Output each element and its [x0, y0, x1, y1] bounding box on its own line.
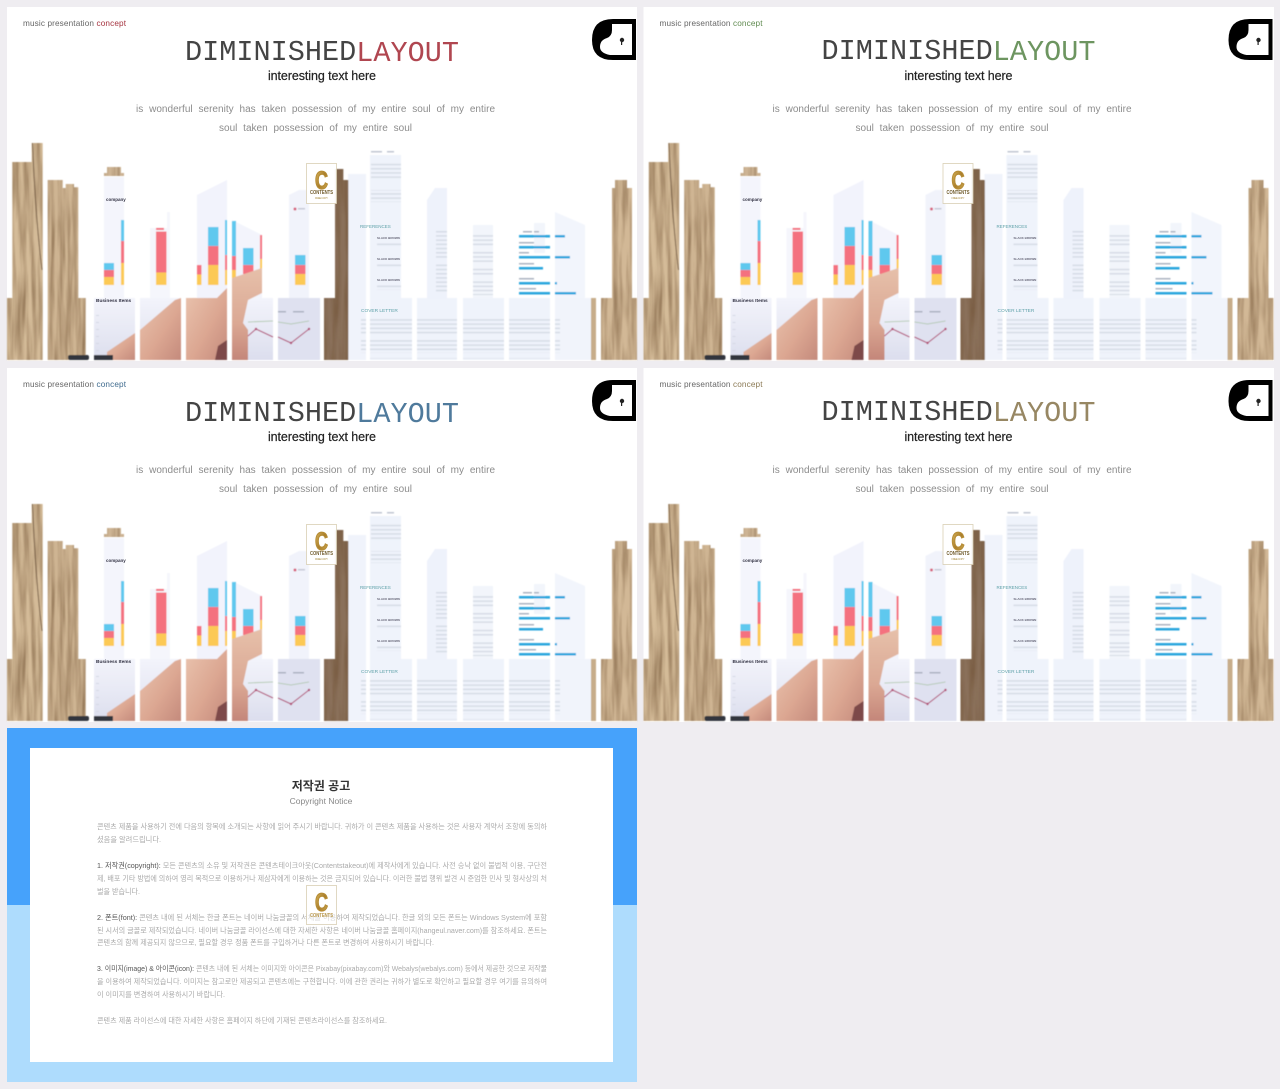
- chart labels: REFERENCES: [360, 585, 391, 590]
- body text: soul taken possession of my entire soul: [856, 123, 1048, 134]
- chart labels: COVER LETTER: [361, 669, 398, 675]
- panel: slide 4 brown: [644, 368, 1274, 722]
- chart labels: SLACK BROWN: [1014, 257, 1036, 261]
- chart labels: SLACK BROWN: [1014, 236, 1036, 240]
- chart labels: SLACK BROWN: [1014, 278, 1036, 282]
- gold contents logo: [306, 886, 336, 924]
- body text: [136, 104, 495, 134]
- chart labels: [732, 197, 1036, 314]
- chart labels: Business Items: [732, 298, 768, 304]
- chart labels: SLACK BROWN: [377, 639, 400, 643]
- copyright subheading: Copyright Notice: [290, 796, 353, 806]
- chart labels: Business Items: [96, 659, 132, 665]
- body text: [136, 465, 495, 495]
- chart labels: company: [742, 558, 763, 563]
- body text: is wonderful serenity has taken possession of my entire soul of my entire: [772, 465, 1132, 476]
- body text: soul taken possession of my entire soul: [219, 123, 412, 134]
- body text: is wonderful serenity has taken possession of my entire soul of my entire: [136, 104, 495, 115]
- gold contents logo: C: [315, 889, 328, 917]
- notice body text: 콘텐츠의 함께 제공되지 않으므로, 필요할 경우 정품 폰트를 구입하거나 다른 폰트로 변경하여 사용하시기 바랍니다.: [97, 938, 434, 947]
- body text: is wonderful serenity has taken possession of my entire soul of my entire: [772, 104, 1132, 115]
- gold contents logo: FREE COPY: [315, 196, 328, 200]
- gold contents logo: [306, 524, 336, 564]
- title: DIMINISHED: [185, 36, 356, 69]
- city skyline collage with charts: [644, 143, 1274, 360]
- notice body text: [97, 822, 547, 1025]
- title: LAYOUT: [356, 398, 459, 431]
- notice body text: 콘텐츠 제품 라이선스에 대한 자세한 사항은 홈페이지 하단에 기재된 콘텐츠라이선스를 참조하세요.: [97, 1016, 387, 1025]
- notice body text: 을 이용하여 제작되었습니다. 이미지는 참고로만 제공되고 콘텐츠에는 구현합니다. 이에 관한 권리는 귀하가 별도로 확인하고 필요할 경우 여기를 유의하여: [97, 977, 547, 986]
- chart labels: COVER LETTER: [998, 669, 1035, 675]
- gold contents logo: FREE COPY: [952, 557, 965, 561]
- title: LAYOUT: [993, 397, 1096, 430]
- title: LAYOUT: [356, 37, 459, 70]
- title: DIMINISHED: [822, 35, 993, 68]
- gold contents logo: CONTENTS: [310, 551, 333, 557]
- body text: [772, 465, 1132, 495]
- icon: corner badge: [1228, 380, 1272, 421]
- body text: [772, 104, 1132, 134]
- body text: soul taken possession of my entire soul: [219, 484, 412, 495]
- chart labels: REFERENCES: [360, 224, 391, 229]
- icon: corner badge: [592, 19, 636, 60]
- chart labels: SLACK BROWN: [377, 597, 400, 601]
- gold contents logo: C: [952, 528, 964, 556]
- subtitle: interesting text here: [268, 69, 376, 83]
- chart labels: COVER LETTER: [361, 308, 398, 314]
- eyebrow tagline: music presentation concept: [23, 19, 127, 28]
- subtitle: interesting text here: [904, 430, 1013, 444]
- notice body text: 셨음을 알려드립니다.: [97, 835, 161, 844]
- notice body text: 1. 저작권(copyright): 모든 콘텐츠의 소유 및 저작권은 콘텐츠테이크아웃(Contentstakeout)에 제작사에게 있습니다. 사전 승낙 없이 불법적 이용, 구단전: [97, 861, 547, 870]
- eyebrow tagline: music presentation concept: [660, 19, 763, 28]
- subtitle: interesting text here: [268, 430, 376, 444]
- panel: copyright notice: [7, 728, 637, 1082]
- chart labels: SLACK BROWN: [1014, 639, 1036, 643]
- body text: soul taken possession of my entire soul: [856, 484, 1048, 495]
- gold contents logo: [306, 164, 336, 204]
- gold contents logo: FREE COPY: [315, 557, 328, 561]
- title: LAYOUT: [993, 36, 1096, 69]
- eyebrow tagline: music presentation concept: [23, 380, 127, 389]
- gold contents logo: CONTENTS: [310, 913, 333, 919]
- city skyline collage with charts: [644, 504, 1274, 721]
- gold contents logo: C: [315, 528, 328, 556]
- panel: slide 1 red: [7, 7, 637, 361]
- title: DIMINISHED: [185, 397, 356, 430]
- chart labels: SLACK BROWN: [377, 278, 400, 282]
- city skyline collage with charts: [7, 143, 637, 360]
- gold contents logo: CONTENTS: [946, 551, 970, 557]
- chart labels: SLACK BROWN: [1014, 597, 1036, 601]
- gold contents logo: C: [952, 167, 964, 195]
- notice body text: 3. 이미지(image) & 아이콘(icon): 콘텐츠 내에 된 서체는 이미지와 아이콘은 Pixabay(pixabay.com)와 Webalys(webalys.com) 등에서 제공한 것으로 저작물: [97, 964, 547, 973]
- chart labels: SLACK BROWN: [377, 618, 400, 622]
- icon: corner badge: [592, 380, 636, 421]
- gold contents logo: CONTENTS: [310, 190, 333, 196]
- city skyline collage with charts: [7, 504, 637, 721]
- chart labels: [732, 558, 1036, 675]
- notice body text: 된 시서의 글꼴로 제작되었습니다. 네이버 나눔글꼴 라이선스에 대한 자세한 사항은 네이버 나눔글꼴 홈페이지(hangeul.naver.com)를 참조하세요. 폰트는: [97, 926, 547, 935]
- gold contents logo: C: [315, 167, 328, 195]
- chart labels: [96, 558, 400, 675]
- chart labels: COVER LETTER: [998, 308, 1035, 314]
- chart labels: REFERENCES: [996, 585, 1027, 590]
- gold contents logo: [943, 524, 973, 564]
- notice body text: 2. 폰트(font): 콘텐츠 내에 된 서체는 한글 폰트는 네이버 나눔글꼴의 서체를 이용하여 제작되었습니다. 한글 외의 모든 폰트는 Windows System에 포함: [97, 913, 547, 922]
- gold contents logo: FREE COPY: [952, 196, 965, 200]
- notice body text: 이 이미지를 변경하여 사용하시기 바랍니다.: [97, 990, 225, 999]
- title: DIMINISHED: [822, 396, 993, 429]
- chart labels: Business Items: [732, 659, 768, 665]
- chart labels: Business Items: [96, 298, 132, 304]
- panel: slide 3 blue: [7, 368, 637, 722]
- panel: slide 2 green: [644, 7, 1274, 361]
- gold contents logo: CONTENTS: [946, 190, 970, 196]
- chart labels: SLACK BROWN: [1014, 618, 1036, 622]
- icon: corner badge: [1228, 19, 1272, 60]
- chart labels: SLACK BROWN: [377, 257, 400, 261]
- subtitle: interesting text here: [904, 69, 1013, 83]
- copyright heading: 저작권 공고: [292, 778, 350, 793]
- notice body text: 제, 배포 기타 방법에 의하여 영리 목적으로 이용하거나 제삼자에게 이용하는 것은 금지되어 있습니다. 이러한 불법 행위 발견 시 준엄한 민사 및 형사상의 처: [97, 874, 547, 883]
- notice body text: 벌을 받습니다.: [97, 887, 140, 896]
- chart labels: company: [106, 558, 126, 563]
- chart labels: company: [106, 197, 126, 202]
- chart labels: [96, 197, 400, 314]
- notice body text: 콘텐츠 제품을 사용하기 전에 다음의 항목에 소개되는 사항에 읽어 주시기 바랍니다. 귀하가 이 콘텐츠 제품을 사용하는 것은 사용자 계약서 조항에 동의하: [97, 822, 547, 831]
- eyebrow tagline: music presentation concept: [660, 380, 763, 389]
- gold contents logo: [943, 164, 973, 204]
- chart labels: company: [742, 197, 763, 202]
- chart labels: SLACK BROWN: [377, 236, 400, 240]
- chart labels: REFERENCES: [996, 224, 1027, 229]
- body text: is wonderful serenity has taken possession of my entire soul of my entire: [136, 465, 495, 476]
